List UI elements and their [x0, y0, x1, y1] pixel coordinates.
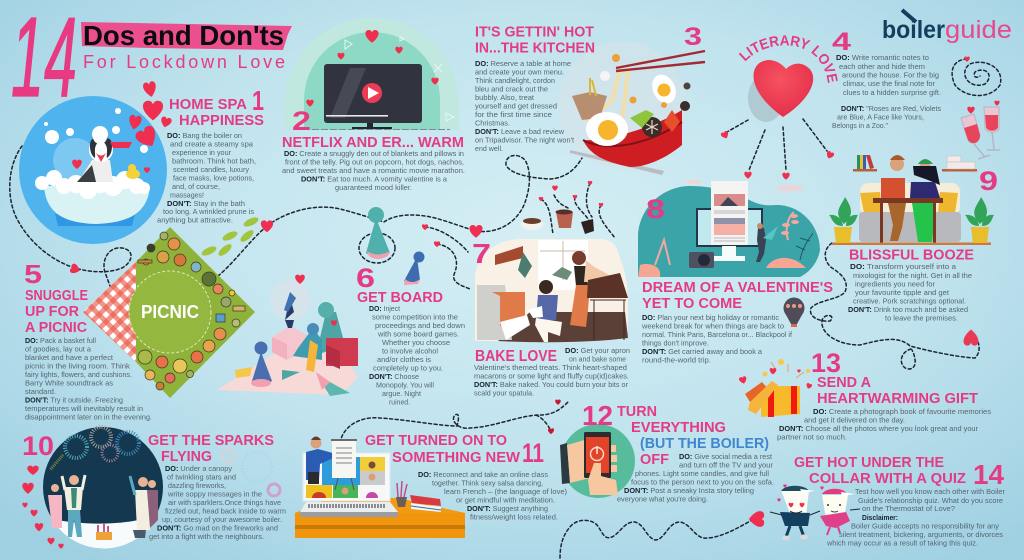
body text: Belongs in a Zoo." [832, 121, 888, 130]
teal pawn [366, 207, 390, 259]
body text: get into a fight with the neighbours. [149, 532, 264, 541]
hearts [422, 224, 440, 247]
panel 4: literary love [720, 28, 1000, 180]
body text [617, 452, 774, 504]
body text: Disclaimer: [862, 513, 898, 522]
body text [475, 59, 574, 153]
body text: DON'T: Go mad on the fireworks and [157, 524, 278, 532]
panel 5: picnic [24, 215, 273, 422]
body text: bubbly. Also, treat [475, 93, 534, 102]
panel 2: netflix [282, 18, 465, 192]
body text: things don't improve. [642, 338, 709, 348]
heading: Dos and Don'ts [83, 20, 284, 51]
body text [25, 336, 152, 422]
heading: UP FOR [25, 304, 80, 320]
heading: SOMETHING NEW [392, 450, 520, 466]
footprints [200, 215, 260, 258]
number 1: 1 [252, 85, 264, 116]
title: 14 Dos and Don'ts [11, 0, 292, 120]
body text: phones. Light some candles, and give full [635, 469, 769, 478]
spiral heart [964, 56, 970, 62]
heading: SNUGGLE [25, 288, 88, 304]
hearts [128, 81, 172, 151]
body text: DON'T: Eat too much. A vomity valentine is a [301, 174, 448, 184]
body text: each other and hide them [839, 62, 925, 71]
body text: on the Thermostat of Love? [862, 504, 955, 513]
body text: and turn off the TV and your [679, 460, 774, 470]
key icon [902, 10, 916, 22]
heading [617, 404, 769, 468]
heading [25, 288, 88, 336]
heading: BLISSFUL BOOZE [849, 248, 974, 264]
body text: scald your spatula. [474, 388, 534, 398]
body text: fizzled out, head back inside to warm [165, 506, 286, 516]
body text: temperatures will inevitably result in [25, 404, 143, 413]
body text: experience in your [172, 148, 232, 157]
body text: DO: Write romantic notes to [836, 53, 929, 62]
heading [365, 433, 520, 466]
body text [474, 346, 630, 398]
body text: DO: Bang the boiler on [167, 131, 242, 140]
body text: anything but attractive. [157, 216, 233, 224]
body text: and get it delivered on the day. [804, 416, 905, 424]
number 6: 6 [356, 263, 375, 293]
body text: DON'T: "Roses are Red, Violets [841, 104, 941, 113]
panel 1: home spa [19, 81, 264, 244]
body text: front of the telly. Pig out on popcorn, hot dogs, nachos, [285, 158, 464, 166]
body text: disappointment later on in the evening. [25, 412, 152, 422]
subtitle: For Lockdown Love [83, 52, 285, 72]
body text: yourself and get dressed [475, 102, 557, 110]
panel 3: kitchen [475, 23, 705, 175]
body text [282, 149, 465, 192]
body text: with some board games. [377, 330, 459, 338]
number 13: 13 [811, 348, 841, 378]
body text: bleu and crack out the [475, 84, 548, 94]
hearts [22, 466, 64, 549]
number 2: 2 [292, 106, 311, 136]
body text: to involve alcohol [382, 346, 438, 356]
body text: Monopoly. You will [376, 380, 434, 390]
picnic diamond: PICNIC [141, 302, 199, 322]
body text: DON'T: Choose [369, 372, 419, 381]
body text: up, courtesy of your awesome boiler. [162, 515, 282, 524]
body text: weekend break for when things are back to [641, 322, 784, 330]
body text: DON'T: Drink too much and be asked [848, 305, 968, 314]
heading: GET BOARD [357, 289, 443, 306]
panel 11: online class [295, 399, 567, 538]
body text: ingredients you need for [855, 280, 936, 288]
body text: learn French – (the language of love) [444, 487, 567, 496]
heading: IT'S GETTIN' HOT [475, 24, 594, 40]
panel 9: blissful booze [829, 155, 998, 346]
body text: climax, use the final note for [843, 79, 936, 88]
heading: EVERYTHING [631, 420, 726, 436]
body text: some competition into the [372, 312, 458, 322]
kitchen illustration [475, 239, 628, 342]
body text: Think candlelight, cordon [475, 76, 555, 85]
noodle bowl illustration [558, 41, 705, 175]
body text: are Blue, A Face like Yours, [837, 112, 924, 122]
spa illustration [19, 96, 167, 244]
heart [469, 225, 483, 238]
body text: massages! [170, 190, 204, 200]
faint fireworks [222, 450, 280, 496]
body text: clues to a hidden surprise gift. [843, 88, 941, 97]
number 11: 11 [522, 438, 544, 468]
body text: DO: Create a photograph book of favourite memories [813, 407, 991, 416]
body text: Test how well you know each other with Boiler [855, 487, 1006, 496]
wordmark: boiler [882, 16, 945, 44]
heading: TURN [617, 404, 657, 420]
body text: of goodies, lay out a [25, 344, 92, 354]
heading: BAKE LOVE [475, 348, 557, 365]
body text: and/or clothes is [377, 355, 431, 364]
heading: OFF [640, 452, 669, 468]
body text: bathroom. Think hot bath, [172, 156, 256, 166]
panel 14: quiz [749, 455, 1006, 548]
body text [157, 131, 256, 224]
body text: everyone what you're doing. [617, 494, 708, 504]
hot air balloon [784, 298, 804, 327]
body text: DON'T: Leave a bad review [475, 127, 565, 136]
body text: DO: Pack a basket full [25, 336, 96, 345]
body text [149, 464, 286, 541]
brush stroke [81, 22, 292, 50]
coffee and treats [521, 181, 603, 234]
body text [418, 470, 567, 522]
body text: Christmas. [475, 118, 510, 128]
heading: HOME SPA [169, 97, 248, 113]
heart [749, 511, 764, 527]
body text: around the house. For the big [842, 70, 939, 80]
body text: picnic in the living room. Think [25, 362, 130, 370]
body text: DO: Get your apron [565, 346, 630, 355]
number 12: 12 [582, 400, 613, 431]
body text [777, 407, 991, 442]
body text: argue. Night [382, 389, 421, 398]
number 8: 8 [646, 194, 665, 224]
heading: (BUT THE BOILER) [640, 436, 769, 452]
body text: standard. [25, 387, 56, 396]
body text: on Tripadvisor. The night won't [475, 136, 574, 144]
body text: to leave the premises. [885, 314, 958, 322]
heading: GET HOT UNDER THE [794, 455, 944, 471]
body text: normal. Think Paris, Barcelona or... Blackpool if [642, 330, 793, 339]
wine glasses [961, 101, 1000, 159]
body text: mixologist for the night. Get in all the [853, 271, 972, 280]
body text: blanket and have a perfect [25, 353, 113, 362]
body text: proceedings and bed down [375, 321, 465, 330]
heading: NETFLIX AND ER... WARM [282, 135, 464, 151]
board game illustration [217, 275, 358, 396]
number 10: 10 [22, 431, 54, 461]
power button hand illustration [560, 424, 635, 498]
body text: and, of course, [172, 182, 220, 191]
big 3d heart [748, 60, 813, 122]
arc heading: LITERARY LOVE [738, 35, 838, 83]
heading: HAPPINESS [179, 113, 264, 129]
body text: DON'T: Bake naked. You could burn your bits or [474, 380, 629, 389]
number 14: 14 [973, 459, 1004, 490]
body text: face masks, love potions, [173, 174, 254, 182]
gift box illustration [739, 359, 813, 417]
panel 13: gift [739, 348, 991, 442]
body text: which may occur as a result of taking this quiz. [826, 538, 978, 548]
heading: DREAM OF A VALENTINE'S [642, 280, 833, 296]
number 5: 5 [24, 259, 42, 289]
number 3: 3 [684, 23, 702, 51]
panel 8: valentine's trip [638, 180, 833, 364]
body text: focus to the person next to you on the sofa. [631, 478, 774, 486]
body text: and sweet treats and have a romantic movie marathon. [282, 166, 465, 175]
heading: HEARTWARMING GIFT [817, 391, 978, 407]
body text: together. Think sexy salsa dancing, [432, 478, 543, 488]
body text: scented candles, luxury [173, 165, 249, 174]
body text: creative. Pork scratchings optional. [853, 296, 966, 306]
body text: DO: Create a snuggly den out of blankets and pillows in [284, 149, 464, 158]
hearts [548, 399, 561, 434]
heading: GET THE SPARKS [148, 433, 274, 449]
body text: DO: Give social media a rest [679, 452, 772, 461]
couple illustration [829, 155, 994, 245]
fireworks circle illustration [43, 427, 163, 549]
hearts [69, 220, 273, 275]
body text: Valentine's themed treats. Think heart-shaped [474, 363, 627, 372]
heading: SEND A [817, 375, 872, 391]
body text: Whether you choose [382, 338, 450, 347]
logo: boilerguide: guide [945, 16, 1012, 44]
body text [848, 262, 972, 322]
body text: on and bake some [569, 354, 626, 364]
picnic diamond [83, 227, 255, 398]
body text: or get mindful with meditation. [456, 496, 555, 504]
heading [169, 97, 264, 129]
body text: guaranteed mood killer. [335, 183, 412, 192]
body text: silent treatment, bickering, arguments, or divorces [839, 530, 1003, 539]
body text: Boiler Guide accepts no responsibility for any [851, 522, 999, 530]
body text: write soppy messages in the [167, 490, 262, 498]
body text: fairy lights, flowers, and cushions. [25, 370, 132, 379]
mascots illustration [770, 484, 860, 540]
body text: DON'T: Suggest anything [467, 504, 548, 513]
body text: of twinkling stars and [167, 472, 236, 482]
body text [369, 304, 465, 406]
body text: fitness/weight loss related. [470, 512, 558, 522]
body text: DON'T: Post a sneaky Insta story telling [624, 486, 754, 495]
heading [642, 280, 833, 312]
number 4: 4 [832, 28, 851, 56]
body text: partner not so much. [777, 432, 847, 442]
body text: end well. [475, 144, 503, 153]
body text: DON'T: Choose all the photos where you look great and your [779, 424, 979, 433]
heading: GET TURNED ON TO [365, 433, 507, 449]
laptop and desk illustration [295, 436, 465, 538]
body text: DON'T: Get carried away and book a [642, 347, 763, 356]
body text: too long. A wrinkled prune is [163, 207, 254, 216]
number 9: 9 [979, 166, 998, 196]
heading [817, 375, 978, 407]
heading: COLLAR WITH A QUIZ [809, 471, 966, 487]
body text: Barry White soundtrack as [25, 378, 113, 388]
small hearts [720, 130, 835, 180]
body text: DO: Reserve a table at home [475, 59, 571, 68]
heading [475, 24, 595, 56]
heading [794, 455, 966, 487]
number 7: 7 [472, 238, 491, 269]
body text: ruined. [389, 398, 410, 406]
body text: for the first time since [475, 110, 552, 119]
blue pawn [404, 252, 424, 285]
logo: boilerguide [882, 10, 1012, 44]
body text: completely up to you. [373, 364, 443, 372]
travel illustration [638, 180, 820, 277]
body text: DO: Reconnect and take an online class [418, 470, 548, 479]
panel 7: bake love [469, 181, 630, 398]
body text: DO: Under a canopy [165, 464, 232, 473]
body text: air with sparklers.Once things have [168, 498, 281, 507]
body text: Guide's relationship quiz. What do you score [858, 496, 1003, 505]
panel 6: board game [217, 207, 465, 406]
body text: macarons or some light and fluffy cup(id)cakes. [474, 372, 629, 380]
tv illustration [285, 18, 459, 130]
body text: DO: Plan your next big holiday or romantic [642, 313, 779, 322]
body text: dazzling fireworks, [168, 481, 226, 490]
heading: YET TO COME [642, 296, 742, 312]
heading: FLYING [161, 449, 212, 465]
panel 10: sparks [22, 427, 286, 549]
heart [964, 329, 978, 346]
body text: and create a steamy spa [170, 140, 254, 148]
body text: round-the-world trip. [642, 356, 711, 364]
body text: DON'T: Try it outside. Freezing [25, 396, 123, 404]
body text: DO: Transform yourself into a [850, 262, 957, 271]
body text [832, 53, 941, 130]
body text [641, 313, 793, 364]
heading: IN...THE KITCHEN [475, 40, 595, 56]
heading: A PICNIC [25, 320, 88, 336]
body text: your favourite tipple and get [855, 288, 949, 297]
body text: and create your own menu. [475, 68, 564, 76]
heading [148, 433, 274, 465]
body text: DON'T: Stay in the bath [167, 199, 245, 208]
panel 12: turn off [560, 400, 774, 504]
body text: DO: Inject [369, 304, 400, 313]
body text [826, 487, 1006, 548]
